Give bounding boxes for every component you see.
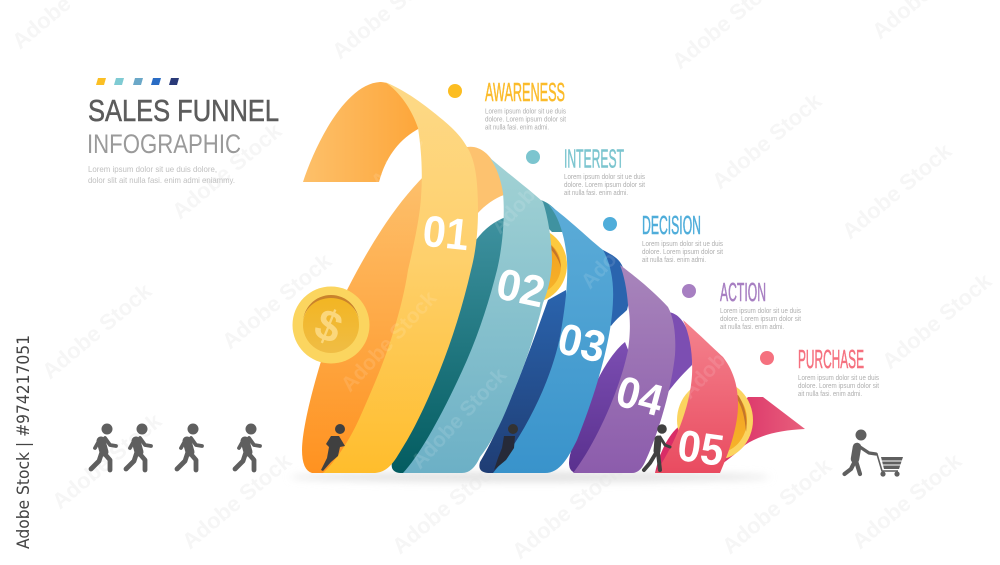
step 3: decision: Lorem ipsum dolor sit ue duis (642, 241, 723, 248)
watermark text: Adobe (487, 175, 548, 238)
stock id: Adobe Stock | #974217051 (14, 335, 33, 549)
step 2: interest: INTEREST (564, 144, 624, 174)
description: dolor slit ait nulla fasi. enim admi eniammy. (88, 175, 235, 185)
step 4: action: ait nulla fasi. enim admi. (720, 324, 784, 331)
text: AWARENESS (485, 77, 565, 107)
step 1: awareness: Lorem ipsum dolor sit ue duis (485, 108, 566, 116)
icon: walker 1 (91, 424, 116, 470)
band 1 front (323, 82, 478, 473)
step numbers: 03 (553, 314, 610, 373)
step 3: decision: ait nulla fasi. enim admi. (642, 257, 706, 264)
icon: runner on band 1 (321, 424, 345, 471)
header block (87, 78, 279, 185)
background watermark: Adobe Stock (507, 458, 627, 564)
icon: walker 2 (126, 424, 151, 470)
watermark text: Adobe (577, 230, 638, 293)
background watermark: Adobe Stock (37, 278, 157, 384)
watermark text: Adobe Stock (337, 287, 441, 396)
icon: large dollar coin (292, 286, 370, 364)
step 5: purchase: ait nulla fasi. enim admi. (798, 391, 862, 398)
colour tabs (96, 78, 179, 85)
background watermark: Adobe Stock (177, 448, 297, 554)
step numbers: 05 (675, 421, 727, 476)
background watermark: Adobe Stock (877, 268, 997, 374)
band 3 back (479, 250, 629, 473)
icon: shopper with cart (844, 430, 903, 477)
ground shadow (290, 472, 770, 482)
icon: coin behind band 2 (493, 227, 567, 303)
step 4: action: dolore. Lorem ipsum dolor sit (720, 316, 801, 323)
step 4: action (682, 277, 801, 331)
watermark text (337, 130, 738, 473)
step 5: purchase: PURCHASE (798, 344, 864, 374)
step 5: purchase: dolore. Lorem ipsum dolor sit (798, 383, 879, 390)
step 3: decision (603, 210, 723, 264)
step 3: decision: DECISION (642, 210, 701, 240)
funnel (292, 82, 805, 476)
icon: walker 4 (235, 424, 260, 470)
band 3 front (493, 204, 613, 473)
background watermark: Adobe Stock (387, 453, 507, 559)
step 2: interest: ait nulla fasi. enim admi. (564, 190, 628, 197)
icon: walker 3 (177, 424, 202, 470)
step 5: purchase (760, 344, 879, 398)
step 1: awareness: dolore. Lorem ipsum dolor sit (485, 116, 566, 124)
background watermark: Adobe Stock (217, 248, 337, 354)
band 4 back (569, 312, 693, 473)
band 5 front (655, 320, 738, 473)
band 1 back (302, 82, 504, 473)
description (88, 164, 235, 185)
watermark text: Adobe (677, 340, 738, 403)
icon: runner on band 4 (644, 424, 670, 470)
step 4: action: Lorem ipsum dolor sit ue duis (720, 308, 801, 315)
step 1: awareness: ait nulla fasi. enim admi. (485, 124, 549, 132)
background watermark: Adobe Stock (167, 118, 287, 224)
background watermark: Adobe Stock (47, 408, 167, 514)
icon: coin behind band 5 (677, 380, 753, 460)
step 1: awareness (448, 77, 566, 132)
step numbers: 04 (611, 367, 669, 426)
step 2: interest (526, 144, 645, 197)
step numbers: 02 (492, 260, 549, 317)
background watermark: Adobe Stock (847, 448, 967, 554)
step 5: purchase: Lorem ipsum dolor sit ue duis (798, 375, 879, 382)
icon: large dollar coin: $ (308, 299, 349, 354)
subtitle: INFOGRAPHIC (87, 129, 241, 159)
step 2: interest: Lorem ipsum dolor sit ue duis (564, 174, 645, 181)
watermark text: Adobe Stock (407, 364, 511, 473)
background watermark: Adobe Stock (707, 88, 827, 194)
description: Lorem ipsum dolor sit ue duis dolore, (88, 164, 217, 174)
icon: runner on band 3 (494, 424, 518, 470)
step 3: decision: dolore. Lorem ipsum dolor sit (642, 249, 723, 256)
band 4 front (573, 265, 675, 473)
step 2: interest: dolore. Lorem ipsum dolor sit (564, 182, 645, 189)
watermark text: Adobe (367, 130, 428, 193)
step numbers: 01 (420, 207, 471, 260)
band 2 back (392, 200, 568, 473)
step numbers (420, 207, 727, 476)
background watermark: Adobe Stock (837, 138, 957, 244)
band 5 back (655, 397, 805, 473)
step 4: action: ACTION (720, 277, 766, 307)
background watermark: Adobe Stock (717, 453, 837, 559)
band 2 front (403, 158, 552, 473)
title: SALES FUNNEL (88, 93, 279, 128)
